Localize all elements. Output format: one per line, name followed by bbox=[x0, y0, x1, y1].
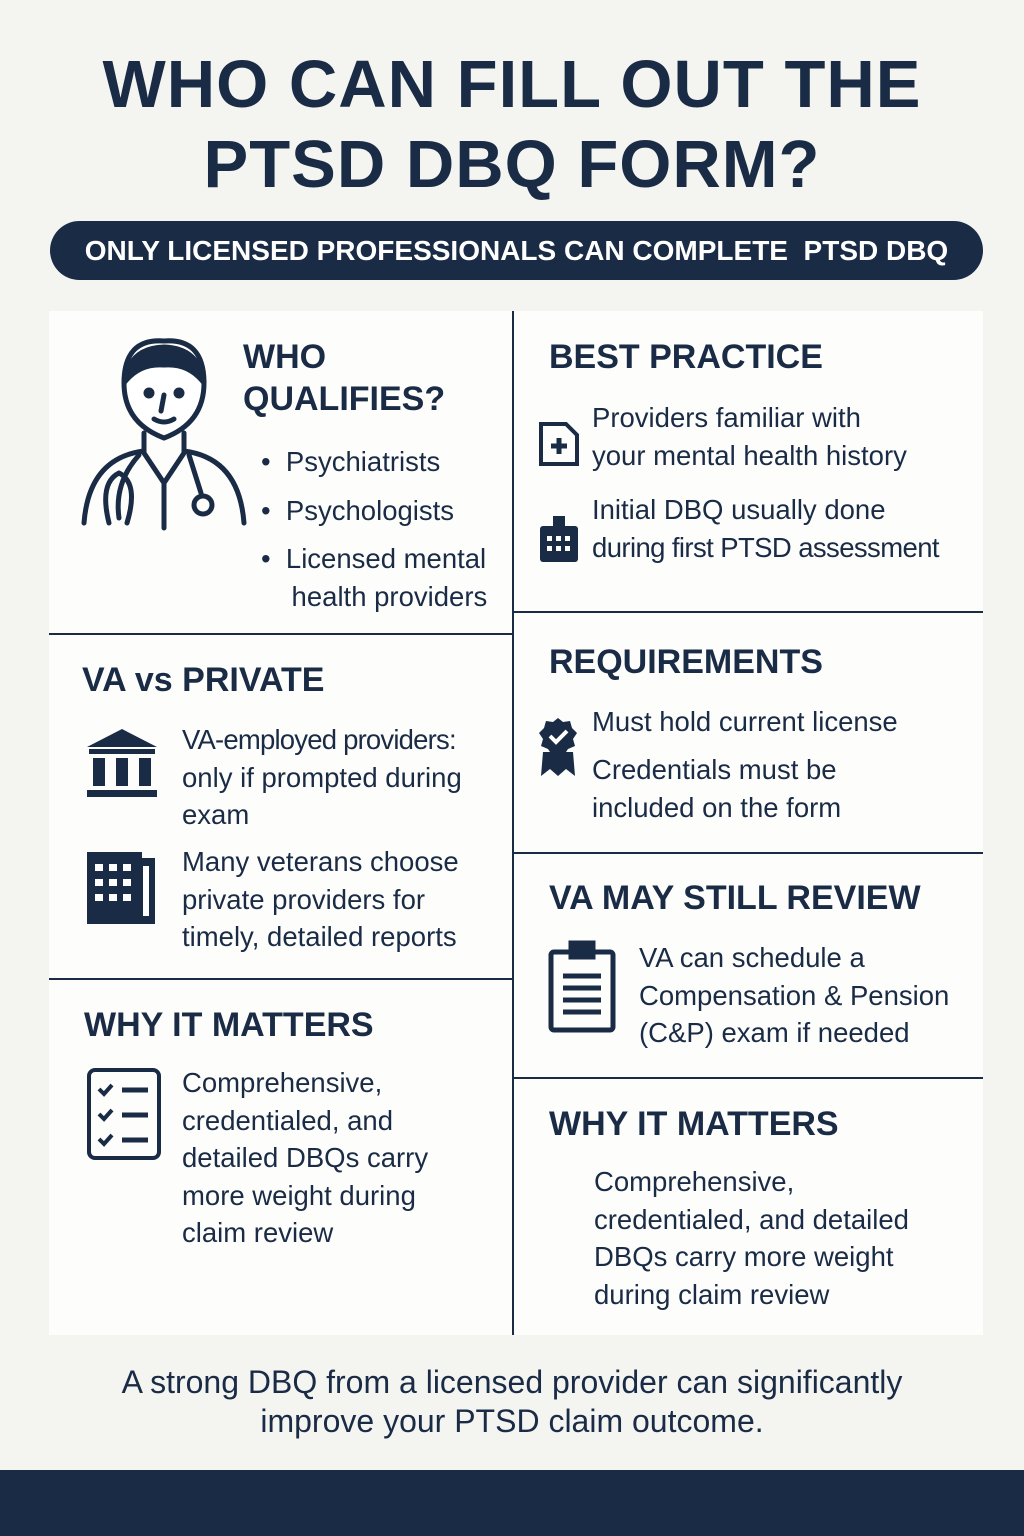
panel: best practice: Initial DBQ usually done bbox=[592, 494, 886, 525]
icon: office building bbox=[87, 852, 155, 924]
panel: va may still review bbox=[548, 879, 949, 1048]
banner bbox=[50, 221, 983, 280]
panel: va may still review: VA can schedule a bbox=[639, 942, 865, 973]
panel: best practice: BEST PRACTICE bbox=[549, 338, 823, 376]
title: PTSD DBQ FORM? bbox=[204, 127, 820, 202]
footer statement bbox=[122, 1364, 902, 1439]
panel: who qualifies: WHO bbox=[243, 338, 326, 376]
icon: government building bbox=[87, 729, 157, 797]
bottom bar bbox=[0, 1470, 1024, 1536]
footer statement: improve your PTSD claim outcome. bbox=[260, 1403, 764, 1439]
panel: who qualifies: • Psychiatrists bbox=[261, 446, 440, 477]
panel: why it matters right: WHY IT MATTERS bbox=[549, 1105, 839, 1143]
panel: va vs private: VA vs PRIVATE bbox=[82, 661, 324, 699]
panel: why it matters right: DBQs carry more weight bbox=[594, 1241, 894, 1272]
panel: va vs private: VA-employed providers: bbox=[182, 724, 456, 755]
panel: va vs private: only if prompted during bbox=[182, 762, 462, 792]
title bbox=[102, 47, 921, 202]
panel: why it matters right: credentialed, and detailed bbox=[594, 1204, 909, 1234]
panel: requirements: Must hold current license bbox=[592, 706, 898, 737]
panel: why it matters right: Comprehensive, bbox=[594, 1166, 794, 1197]
panel: best practice: your mental health history bbox=[592, 440, 907, 470]
banner: ONLY LICENSED PROFESSIONALS CAN COMPLETE PTSD DBQ bbox=[85, 235, 948, 266]
panel: why it matters left: more weight during bbox=[182, 1180, 416, 1210]
icon: badge bbox=[539, 718, 577, 776]
footer statement: A strong DBQ from a licensed provider can significantly bbox=[122, 1364, 902, 1400]
panel: requirements: included on the form bbox=[592, 792, 841, 822]
panel: va may still review: Compensation & Pension bbox=[639, 980, 949, 1010]
panel: va vs private: timely, detailed reports bbox=[182, 921, 457, 952]
panel: who qualifies: QUALIFIES? bbox=[243, 380, 445, 418]
panel: requirements bbox=[539, 643, 898, 822]
icon: medical folder bbox=[539, 422, 579, 466]
panel: requirements: REQUIREMENTS bbox=[549, 643, 823, 681]
panel: requirements: Credentials must be bbox=[592, 754, 837, 785]
panel: va vs private: Many veterans choose bbox=[182, 846, 459, 877]
panel: va vs private: private providers for bbox=[182, 884, 425, 914]
panel: why it matters left: Comprehensive, bbox=[182, 1067, 382, 1098]
panel: best practice bbox=[539, 338, 940, 563]
panel: why it matters left bbox=[84, 1006, 428, 1248]
panel: va may still review: (C&P) exam if needed bbox=[639, 1017, 910, 1048]
panel: why it matters left: claim review bbox=[182, 1217, 333, 1248]
icon: doctor bbox=[82, 338, 246, 530]
panel: why it matters left: credentialed, and bbox=[182, 1104, 393, 1136]
panel: best practice: during first PTSD assessment bbox=[592, 532, 939, 562]
content card bbox=[49, 311, 983, 1335]
panel: who qualifies bbox=[82, 338, 487, 612]
panel: who qualifies: • Licensed mental bbox=[261, 543, 486, 574]
panel: why it matters right bbox=[549, 1105, 909, 1310]
icon: checklist bbox=[87, 1068, 161, 1160]
panel: why it matters left: WHY IT MATTERS bbox=[84, 1006, 374, 1044]
panel: best practice: Providers familiar with bbox=[592, 402, 861, 433]
panel: va may still review: VA MAY STILL REVIEW bbox=[549, 879, 921, 917]
icon: clipboard bbox=[548, 940, 616, 1032]
panel: why it matters left: detailed DBQs carry bbox=[182, 1142, 428, 1173]
panel: va vs private bbox=[82, 661, 462, 952]
title: WHO CAN FILL OUT THE bbox=[103, 47, 921, 122]
panel: who qualifies: • Psychologists bbox=[261, 494, 454, 526]
panel: why it matters right: during claim review bbox=[594, 1278, 829, 1310]
icon: hospital bbox=[540, 516, 578, 562]
panel: va vs private: exam bbox=[182, 799, 249, 830]
panel: who qualifies: health providers bbox=[292, 580, 487, 612]
